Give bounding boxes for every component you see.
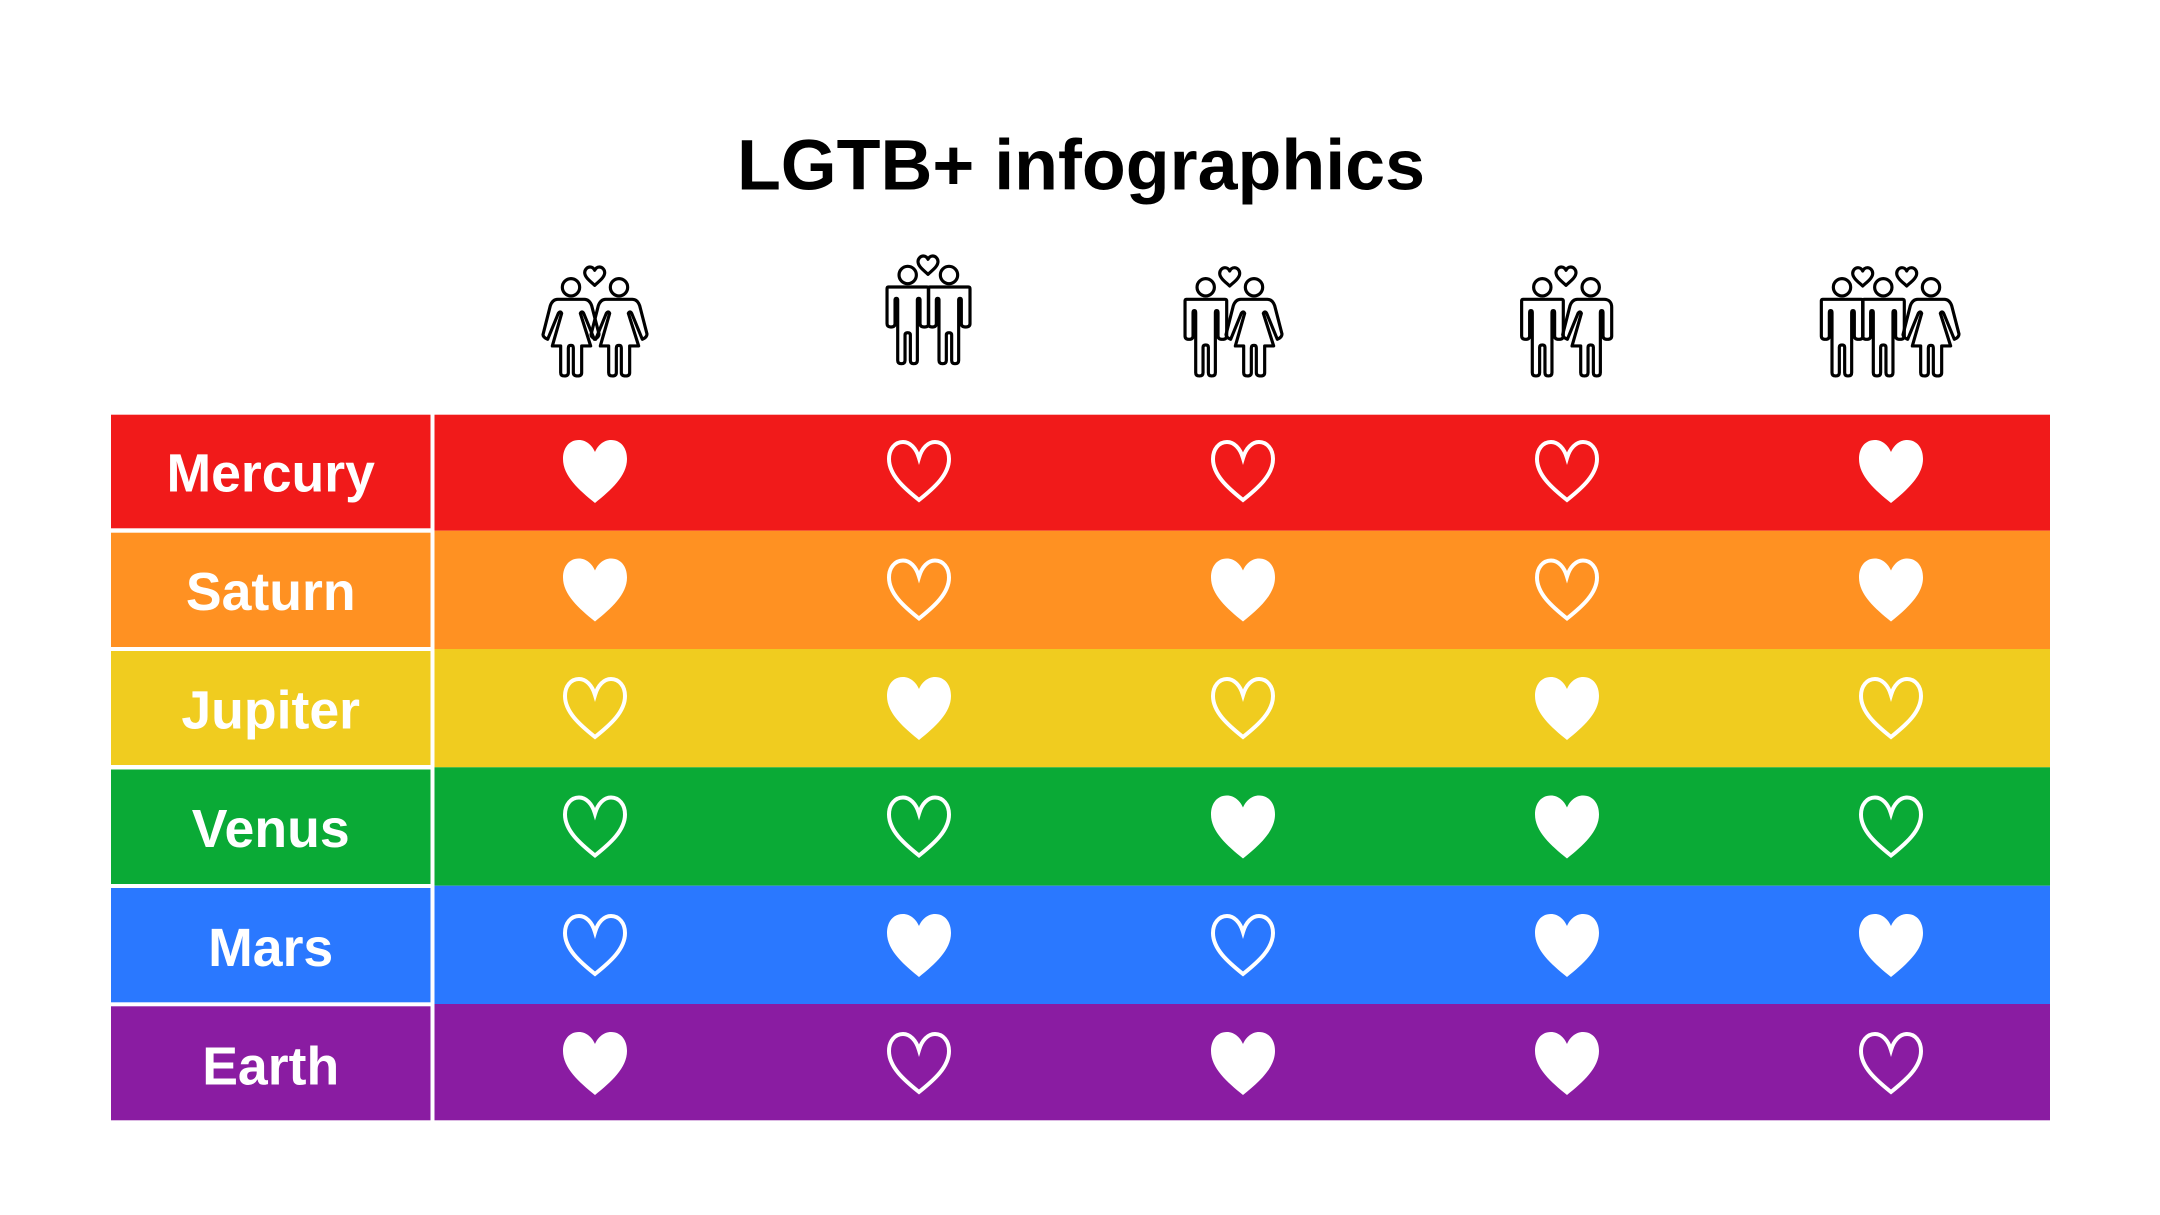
row: Mars: Mars bbox=[208, 918, 333, 978]
row: Jupiter bbox=[111, 649, 2050, 767]
icon: man and transgender figure couple bbox=[1522, 267, 1612, 376]
row: Venus: Venus bbox=[192, 799, 350, 859]
row: Venus bbox=[111, 767, 2050, 886]
row: Mercury bbox=[111, 415, 2050, 531]
icon: two women couple bbox=[543, 267, 647, 376]
icon: man and woman couple bbox=[1185, 268, 1282, 376]
row: Mercury: Mercury bbox=[166, 444, 375, 504]
row: Mars bbox=[111, 886, 2050, 1004]
row: Jupiter: Jupiter bbox=[181, 681, 360, 741]
icon: two men couple bbox=[887, 256, 970, 364]
row: Earth bbox=[111, 1004, 2050, 1120]
icon: polyamorous trio bbox=[1821, 268, 1959, 376]
row: Saturn bbox=[111, 531, 2050, 649]
row: Saturn: Saturn bbox=[186, 562, 356, 622]
title: LGTB+ infographics bbox=[737, 126, 1425, 206]
row: Earth: Earth bbox=[202, 1036, 339, 1096]
